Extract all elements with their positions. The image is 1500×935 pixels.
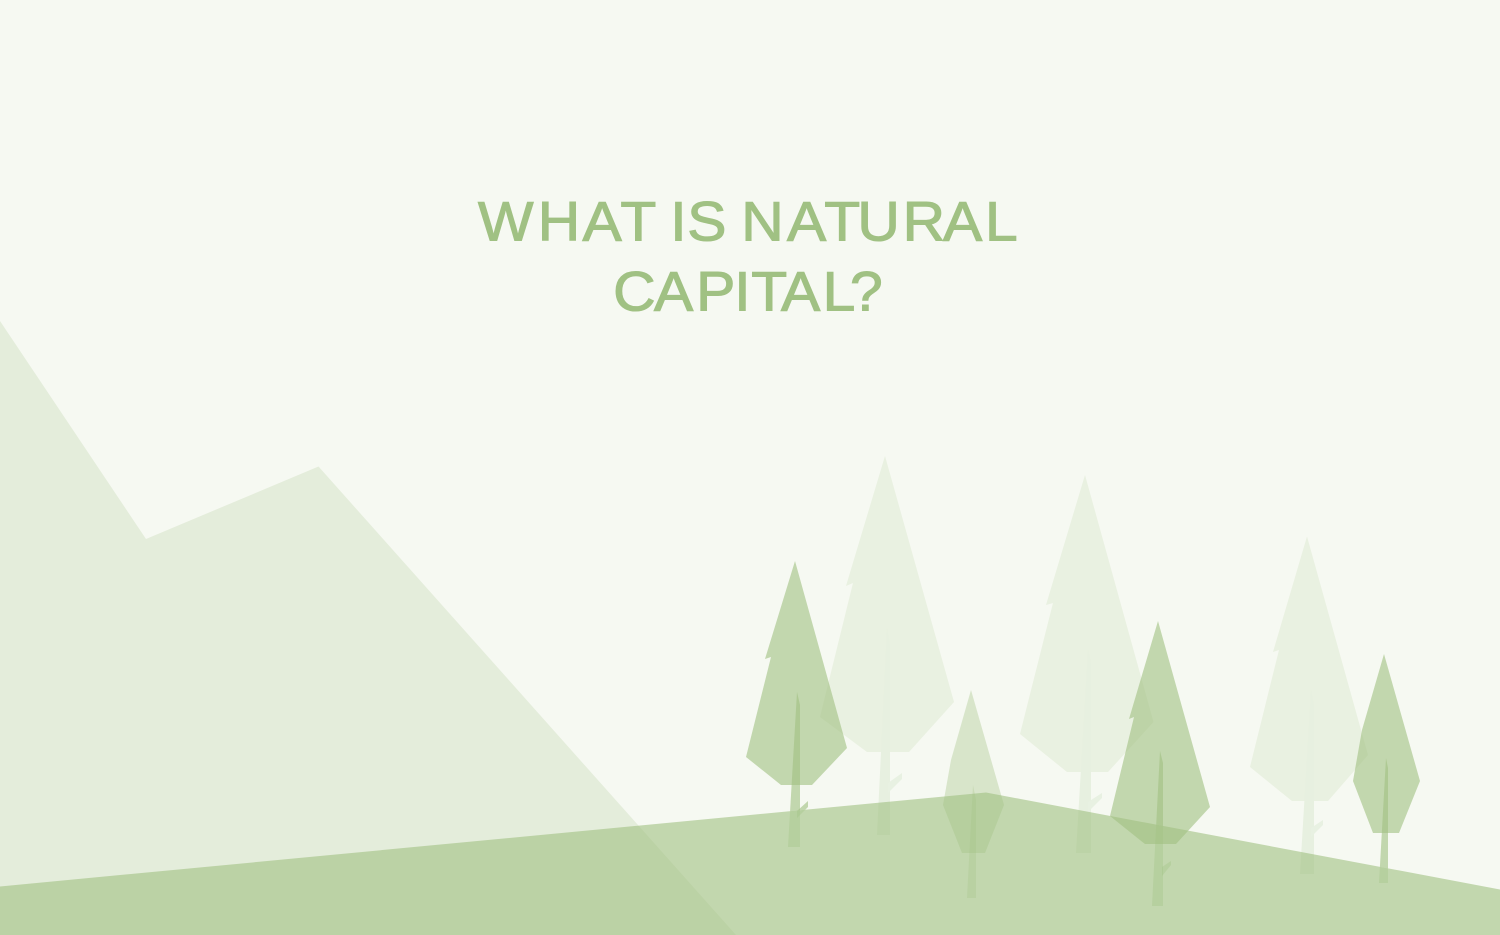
canopy [943,690,1004,853]
hill [0,792,1500,935]
canopy [746,561,847,785]
branch [1088,793,1102,812]
illustration: natural capital landscape scene [0,201,1500,935]
trunk [1300,690,1314,874]
title line 1: WHAT IS NATURAL [478,191,1018,253]
canopy [1020,475,1154,772]
title line 2: CAPITAL? [613,261,883,323]
trunk and branch above the hill line [1156,752,1163,826]
canopy [820,456,954,752]
trunk above the hill line [1380,758,1388,868]
trunk below the hill line [1379,867,1388,883]
tree: front left [746,561,847,847]
tree: back centre, pale [1020,475,1154,853]
tree: back right, pale [1250,536,1368,874]
title [478,191,1018,323]
tree: back left, pale [820,456,954,835]
tree: front centre [1110,621,1210,906]
trunk [967,785,976,898]
mountain [0,321,736,935]
branch [1311,820,1323,837]
tree: front right [1353,654,1420,883]
trunk [877,628,890,835]
trunk and branch below the hill line [788,810,804,847]
branch [888,773,902,793]
trunk and branch above the hill line [790,692,808,812]
trunk and branch below the hill line [1152,844,1171,906]
canopy [1110,621,1210,844]
tree: small centre [943,690,1004,898]
canopy [1353,654,1420,833]
trunk [1076,650,1091,853]
canopy [1250,536,1368,801]
